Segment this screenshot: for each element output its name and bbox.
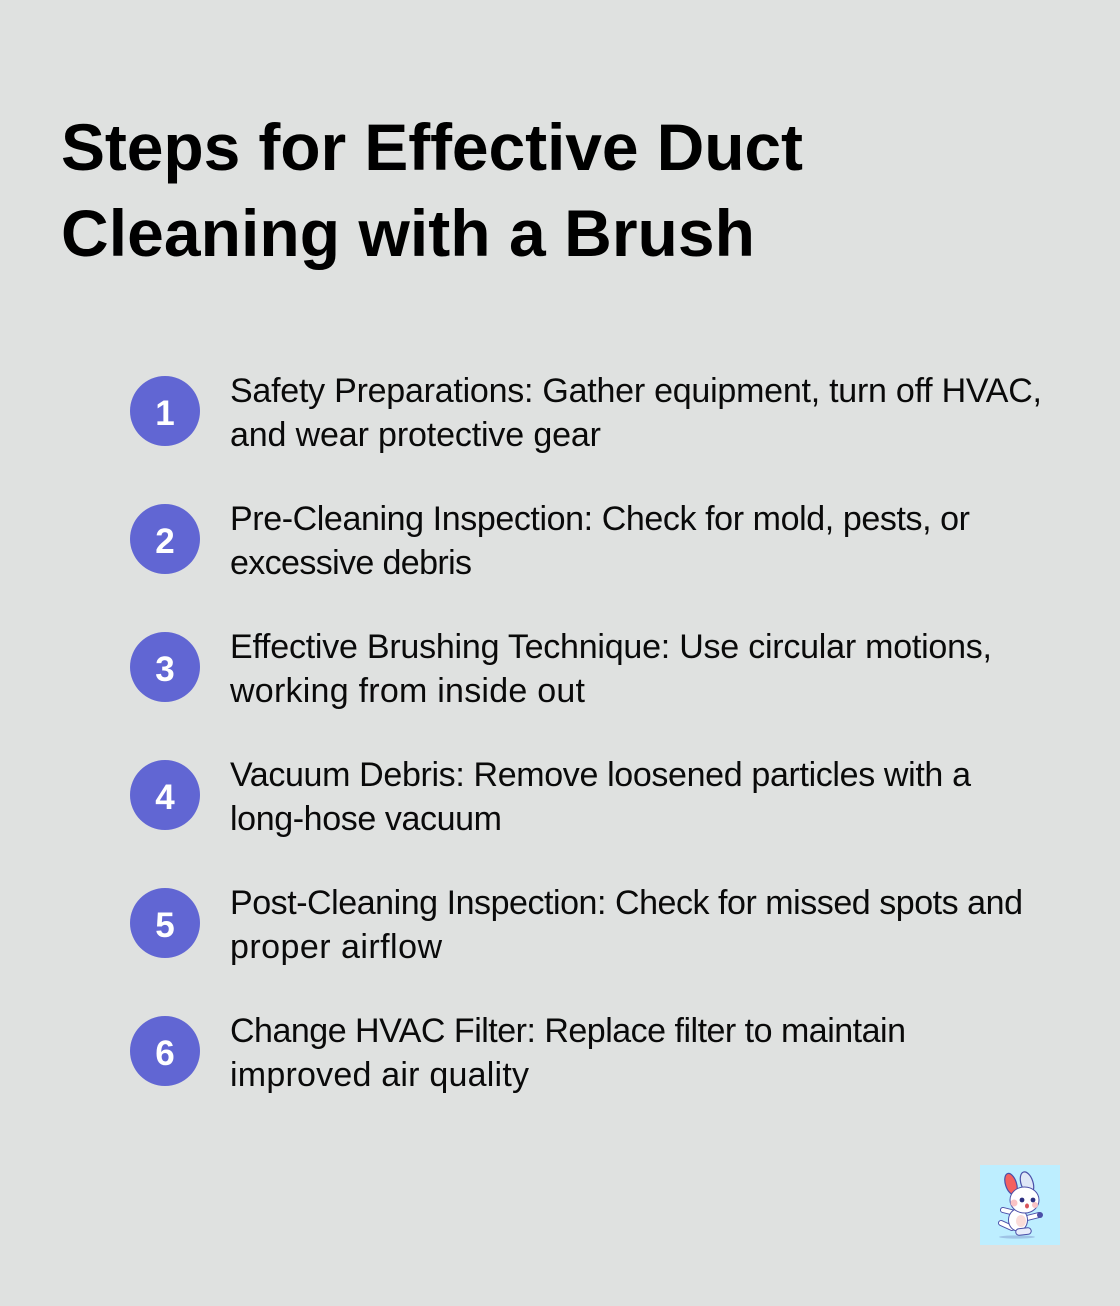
step 2 text <box>230 500 970 582</box>
step 1 text <box>230 372 1042 454</box>
icon: bunny logo <box>980 1165 1060 1245</box>
title <box>61 110 803 270</box>
step 3 number badge: 3 <box>155 650 175 689</box>
step 4 number badge <box>130 760 200 830</box>
step 2 text: Pre-Cleaning Inspection: Check for mold, pests, or <box>230 500 970 538</box>
step 1 number badge: 1 <box>155 394 175 433</box>
step 4 number badge: 4 <box>155 778 175 817</box>
step 3 text: Effective Brushing Technique: Use circular motions, <box>230 628 992 666</box>
step 3 <box>130 628 992 710</box>
step 6 number badge <box>130 1016 200 1086</box>
step 3 number badge <box>130 632 200 702</box>
title: Cleaning with a Brush <box>61 196 755 270</box>
step 4 <box>130 756 971 838</box>
step 6 text <box>230 1012 906 1094</box>
step 1 <box>130 372 1042 454</box>
step 1 number badge <box>130 376 200 446</box>
step 1 text: Safety Preparations: Gather equipment, turn off HVAC, <box>230 372 1042 410</box>
step 2 <box>130 500 970 582</box>
step 5 text: Post-Cleaning Inspection: Check for missed spots and <box>230 884 1023 922</box>
step 2 number badge <box>130 504 200 574</box>
step 6 text: Change HVAC Filter: Replace filter to maintain <box>230 1012 906 1050</box>
step 6 text: improved air quality <box>230 1056 529 1094</box>
step 5 number badge: 5 <box>155 906 175 945</box>
step 6 number badge: 6 <box>155 1034 175 1073</box>
step 6 <box>130 1012 906 1094</box>
step 1 text: and wear protective gear <box>230 416 601 454</box>
step 5 <box>130 884 1023 966</box>
step 4 text <box>230 756 971 838</box>
step 4 text: Vacuum Debris: Remove loosened particles with a <box>230 756 971 794</box>
step 3 text: working from inside out <box>229 672 586 710</box>
step 4 text: long-hose vacuum <box>230 800 502 838</box>
step 5 text <box>230 884 1023 966</box>
step 2 number badge: 2 <box>155 522 175 561</box>
step 2 text: excessive debris <box>230 544 472 582</box>
step 5 number badge <box>130 888 200 958</box>
step 5 text: proper airflow <box>230 928 442 966</box>
title: Steps for Effective Duct <box>61 110 803 184</box>
step 3 text <box>229 628 992 710</box>
